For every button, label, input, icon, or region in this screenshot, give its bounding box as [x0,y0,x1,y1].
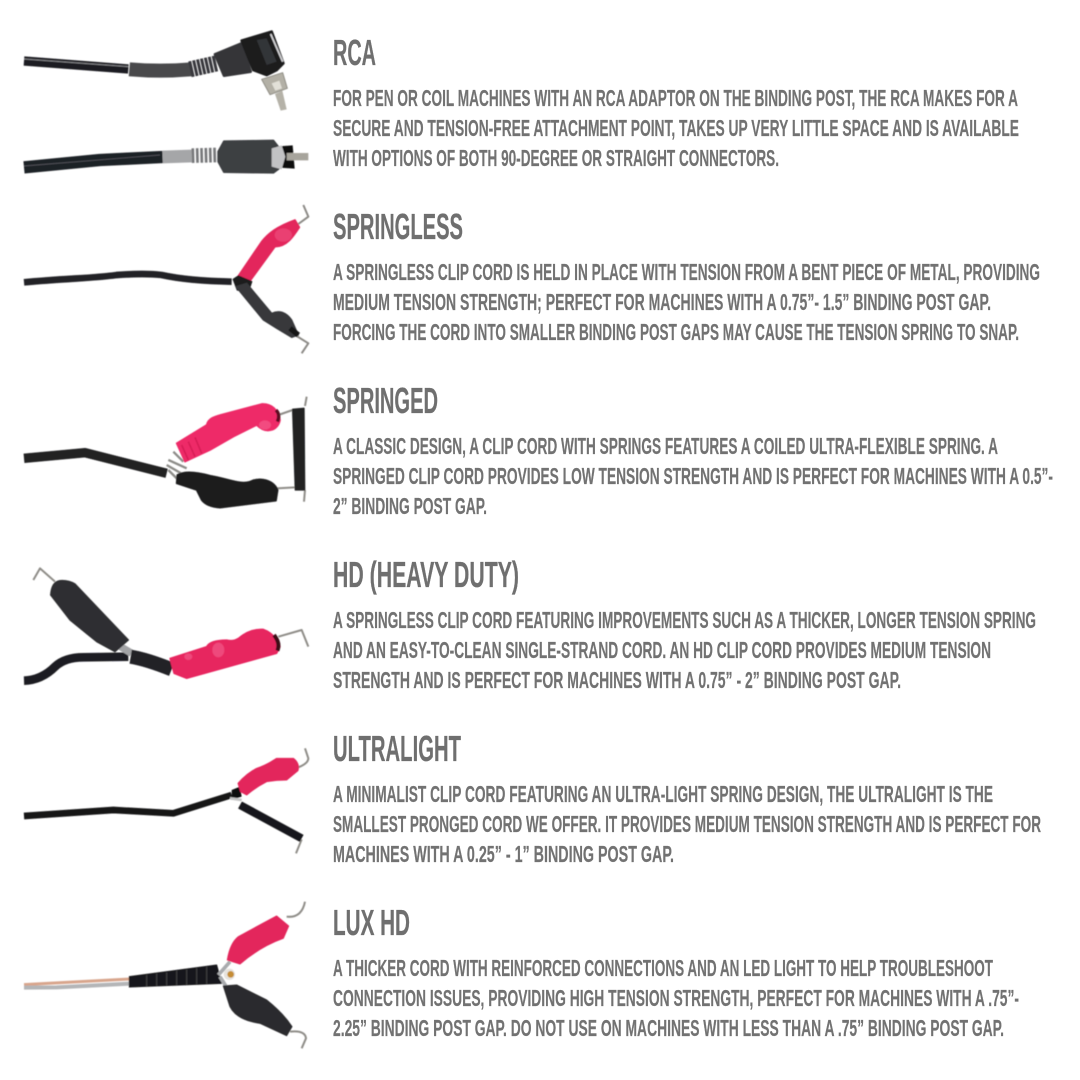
text: Springed description: 2” BINDING POST GAP. [333,493,487,519]
heading: Springless: SPRINGLESS [333,206,463,247]
text: Ultralight description: MACHINES WITH A 0.25” - 1” BINDING POST GAP. [333,841,674,867]
panel: RCA [24,32,1019,173]
icon: springless clip cord [24,205,308,353]
text: Ultralight description [333,781,1041,867]
panel: HD (Heavy Duty) [24,554,1036,693]
panel: Springed [24,380,1053,519]
panel: Ultralight [24,728,1041,867]
icon: RCA cords [24,32,308,173]
text: HD description [333,607,1036,693]
heading: Lux HD: LUX HD [333,902,410,943]
text: Springless description [333,259,1040,345]
panel: Lux HD [24,902,1019,1048]
icon: Lux HD clip cord [24,902,306,1048]
icon: HD clip cord [24,568,308,681]
heading: RCA: RCA [333,32,376,73]
text: Lux HD description [333,955,1019,1041]
heading: Springed: SPRINGED [333,380,438,421]
heading: HD (Heavy Duty): HD (HEAVY DUTY) [333,554,519,595]
panel: Springless [24,205,1040,353]
text: Springed description [333,433,1053,519]
heading: Ultralight: ULTRALIGHT [333,728,461,769]
text: RCA description [333,85,1019,171]
icon: ultralight clip cord [24,748,308,853]
icon: springed clip cord [24,397,307,508]
